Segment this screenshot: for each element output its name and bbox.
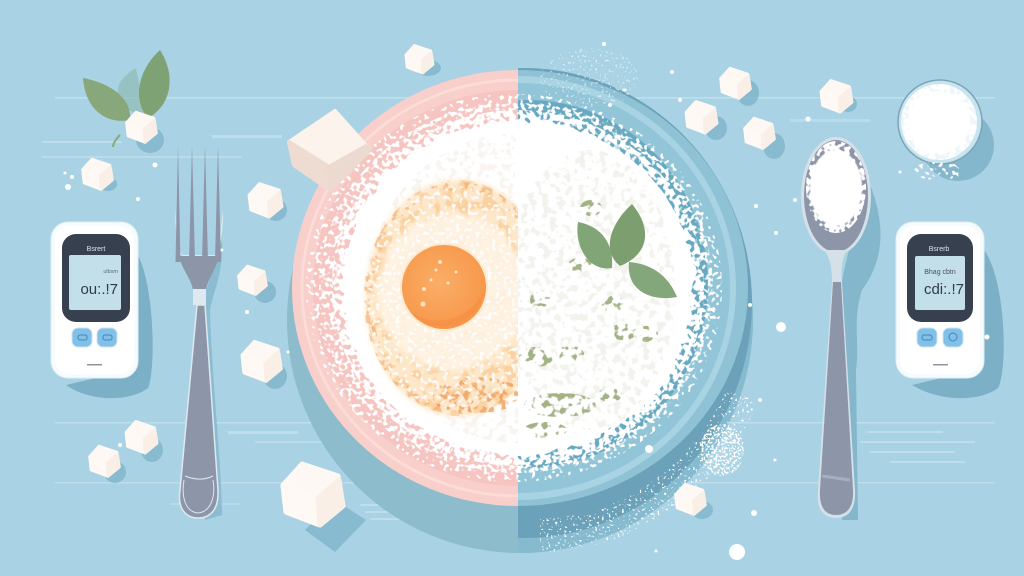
meter readout: Bhag cbtn: [924, 269, 956, 276]
white specks: [568, 42, 786, 560]
sugar cube: large on plate edge: [289, 111, 370, 190]
glucose meter: left: [51, 222, 153, 398]
sugar cube: bottom left 1: [126, 421, 157, 453]
sugar cube shadows: [99, 60, 857, 552]
glucose meter: right: [896, 222, 1004, 398]
meter readout: cdi:.!7: [924, 281, 964, 298]
icon: leaves with sugar cube, top left: [83, 50, 170, 147]
meter buttons: [917, 328, 963, 366]
icon: basil leaves on rice: [577, 204, 677, 298]
sugar cube: bottom left 2: [90, 446, 120, 476]
faint horizontal lines: [42, 97, 995, 520]
icon: egg yolk: [400, 243, 488, 331]
scattered sugar specks: [64, 98, 990, 462]
sugar cube: under leaves: [126, 112, 156, 142]
meter display: [915, 256, 965, 310]
egg: orange halo: [363, 177, 518, 419]
icon: fork: [175, 145, 223, 520]
sugar cube: by fork middle: [238, 266, 267, 295]
meter body: [51, 222, 138, 378]
sugar cube: top centre: [406, 45, 433, 73]
icon: bowl of salt: [898, 80, 994, 181]
meter body: [896, 222, 984, 378]
green flecks in rice: [505, 150, 675, 438]
sugar cube: by fork lower: [242, 342, 281, 381]
sugar cube: top right group 4: [744, 118, 774, 148]
sugar cube: top right group 2: [821, 80, 852, 112]
meter display: [69, 255, 121, 310]
meter buttons: [72, 328, 117, 366]
rice mound: [313, 101, 715, 475]
sugar cube: bottom right: [676, 484, 706, 514]
meter readout: ou:.!7: [80, 281, 118, 298]
meter brand label: Bsrert: [87, 246, 105, 253]
panel: pink plate half: [292, 70, 518, 506]
meter screen bezel: [907, 234, 973, 322]
meter readout: [924, 269, 964, 298]
meter brand label: Bsrerb: [929, 246, 949, 253]
meter shadow: [912, 250, 1004, 398]
meter readout: [80, 269, 118, 298]
sugar cube: left: [82, 159, 112, 190]
icon: spoon with sugar: [801, 137, 880, 520]
sugar cube: top right group 1: [720, 68, 750, 98]
sugar cube: by fork upper: [249, 184, 282, 217]
sugar cube: top right group 3: [686, 101, 717, 133]
sugar cube: large bottom: [283, 464, 343, 525]
meter shadow: [66, 250, 153, 398]
plate shadow: [287, 68, 753, 553]
panel: blue plate half: [518, 70, 748, 506]
meter screen bezel: [62, 234, 130, 322]
meter readout: ulbsm: [103, 269, 118, 275]
salt spill across plate shadow: [540, 48, 744, 536]
